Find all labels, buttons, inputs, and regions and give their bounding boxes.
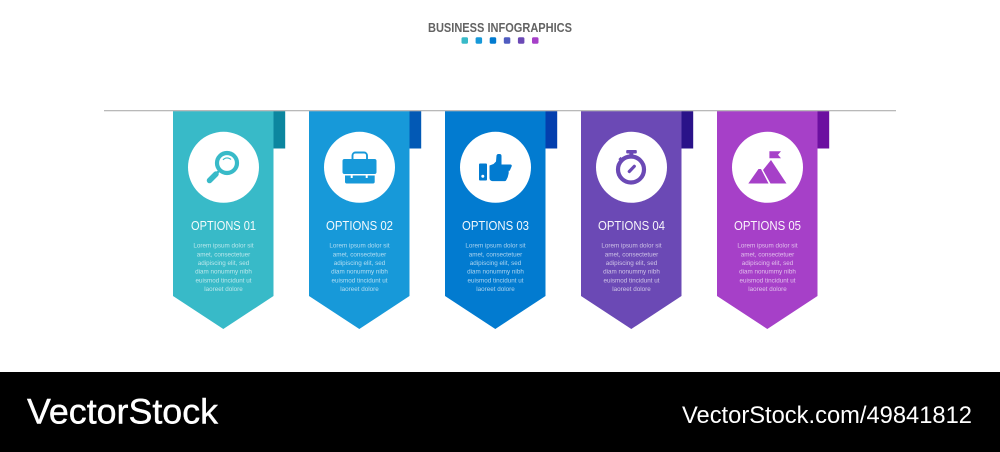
body text 05: Lorem ipsum dolor sit [737, 242, 798, 250]
body text 05: adipiscing elit, sed [742, 260, 794, 267]
ribbon body 03 [445, 111, 546, 329]
body text 04: amet, consectetuer [605, 251, 658, 258]
heading 01: OPTIONS 01 [191, 218, 256, 233]
ribbon body 02 [309, 111, 410, 329]
body text 01: adipiscing elit, sed [198, 260, 250, 267]
body text 01: laoreet dolore [204, 286, 243, 293]
body text 02: Lorem ipsum dolor sit [329, 242, 390, 250]
body text 02: laoreet dolore [340, 286, 379, 293]
heading 05: OPTIONS 05 [734, 218, 801, 233]
body text 01: euismod tincidunt ut [195, 277, 252, 284]
body text 02: diam nonummy nibh [331, 269, 388, 276]
body text 05 [737, 242, 798, 293]
footer logo text: VectorStock [27, 392, 219, 432]
footer url text: VectorStock.com/49841812 [682, 402, 972, 429]
ribbon tab 01 [274, 111, 285, 148]
ribbon body 04 [581, 111, 682, 329]
panel: options 02 [309, 111, 421, 329]
body text 04 [601, 242, 662, 293]
body text 03: adipiscing elit, sed [470, 260, 522, 267]
footer bar [0, 372, 1000, 452]
body text 03: diam nonummy nibh [467, 269, 524, 276]
body text 04: laoreet dolore [612, 286, 651, 293]
body text 03: euismod tincidunt ut [467, 277, 524, 284]
body text 05: diam nonummy nibh [739, 269, 796, 276]
body text 01 [193, 242, 254, 293]
icon: thumbs up [479, 154, 512, 181]
ribbon tab 05 [818, 111, 829, 148]
ribbon tab 02 [410, 111, 421, 148]
heading 02: OPTIONS 02 [326, 218, 393, 233]
title: BUSINESS INFOGRAPHICS [428, 20, 572, 35]
icon: stopwatch [618, 150, 644, 182]
body text 04: adipiscing elit, sed [606, 260, 658, 267]
ribbon tab 04 [682, 111, 693, 148]
ribbon body 05 [717, 111, 818, 329]
title colour dots [462, 37, 538, 44]
body text 03 [465, 242, 526, 293]
body text 05: laoreet dolore [748, 286, 787, 293]
panel: options 01 [173, 111, 285, 329]
icon: magnifying glass [210, 153, 237, 180]
icon circle 01 [188, 132, 259, 203]
icon circle 03 [460, 132, 531, 203]
ribbon tab 03 [546, 111, 557, 148]
body text 02: euismod tincidunt ut [331, 277, 388, 284]
body text 04: diam nonummy nibh [603, 269, 660, 276]
body text 03: Lorem ipsum dolor sit [465, 242, 526, 250]
icon circle 05 [732, 132, 803, 203]
body text 02: adipiscing elit, sed [334, 260, 386, 267]
icon: briefcase [342, 152, 376, 184]
heading 04: OPTIONS 04 [598, 218, 665, 233]
body text 01: Lorem ipsum dolor sit [193, 242, 254, 250]
body text 05: euismod tincidunt ut [739, 277, 796, 284]
body text 03: amet, consectetuer [469, 251, 522, 258]
icon circle 04 [596, 132, 667, 203]
icon circle 02 [324, 132, 395, 203]
icon: mountain with flag [748, 151, 786, 184]
panel: options 05 [717, 111, 829, 329]
body text 05: amet, consectetuer [741, 251, 794, 258]
top rule line [104, 110, 896, 111]
panel: options 04 [581, 111, 693, 329]
ribbon body 01 [173, 111, 274, 329]
body text 03: laoreet dolore [476, 286, 515, 293]
body text 02 [329, 242, 390, 293]
body text 01: amet, consectetuer [197, 251, 250, 258]
body text 01: diam nonummy nibh [195, 269, 252, 276]
body text 04: euismod tincidunt ut [603, 277, 660, 284]
heading 03: OPTIONS 03 [462, 218, 529, 233]
body text 02: amet, consectetuer [333, 251, 386, 258]
panel: options 03 [445, 111, 557, 329]
body text 04: Lorem ipsum dolor sit [601, 242, 662, 250]
